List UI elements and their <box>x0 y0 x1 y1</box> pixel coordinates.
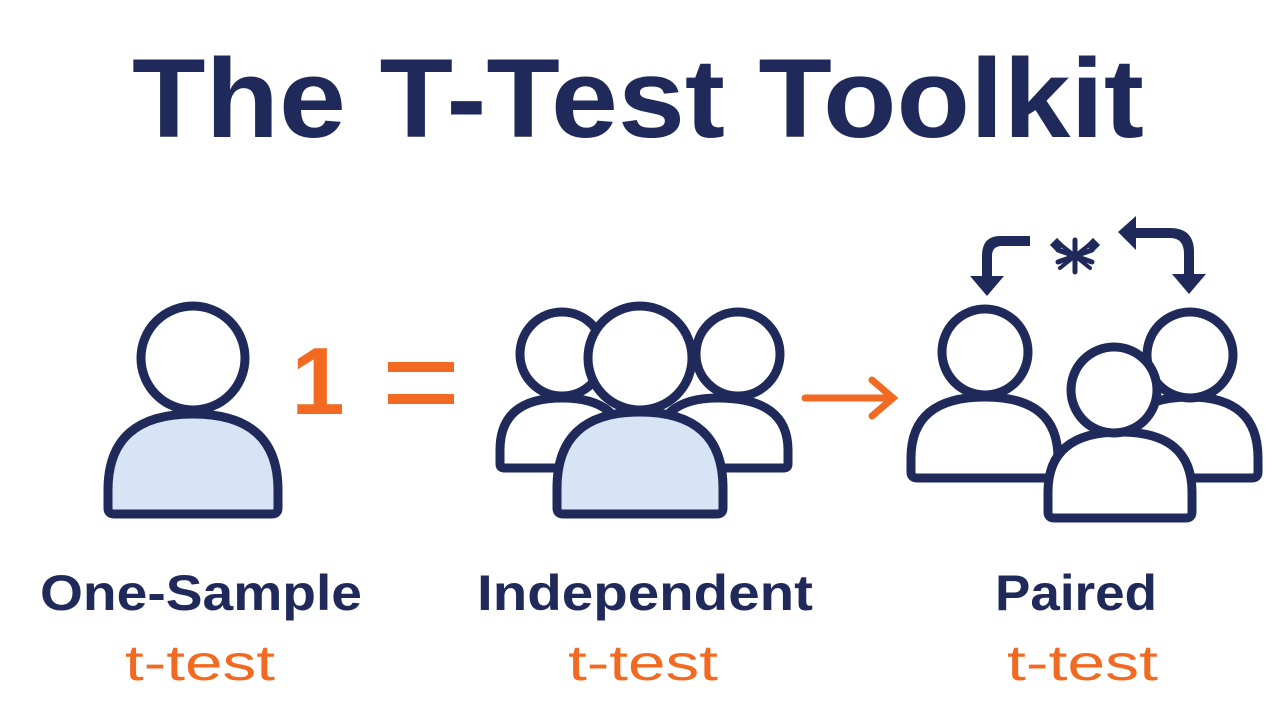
symbol: one equals: 1 <box>291 328 345 435</box>
arrow: orange right <box>805 380 893 416</box>
icon: paired people <box>911 309 1258 518</box>
label: paired <box>995 565 1158 691</box>
label: paired: Paired <box>995 565 1157 621</box>
title: The T-Test Toolkit <box>132 36 1144 161</box>
label: paired: t-test <box>1007 635 1158 691</box>
label: independent <box>477 565 813 691</box>
symbol: one equals <box>291 328 454 435</box>
label: independent: Independent <box>477 565 813 621</box>
label: one-sample: One-Sample <box>40 565 362 621</box>
icon: paired swap arrows <box>970 216 1206 296</box>
label: one-sample: t-test <box>125 635 275 691</box>
icon: independent group <box>500 306 788 514</box>
icon: one-sample person <box>108 306 278 514</box>
label: one-sample <box>40 565 362 691</box>
label: independent: t-test <box>568 635 718 691</box>
